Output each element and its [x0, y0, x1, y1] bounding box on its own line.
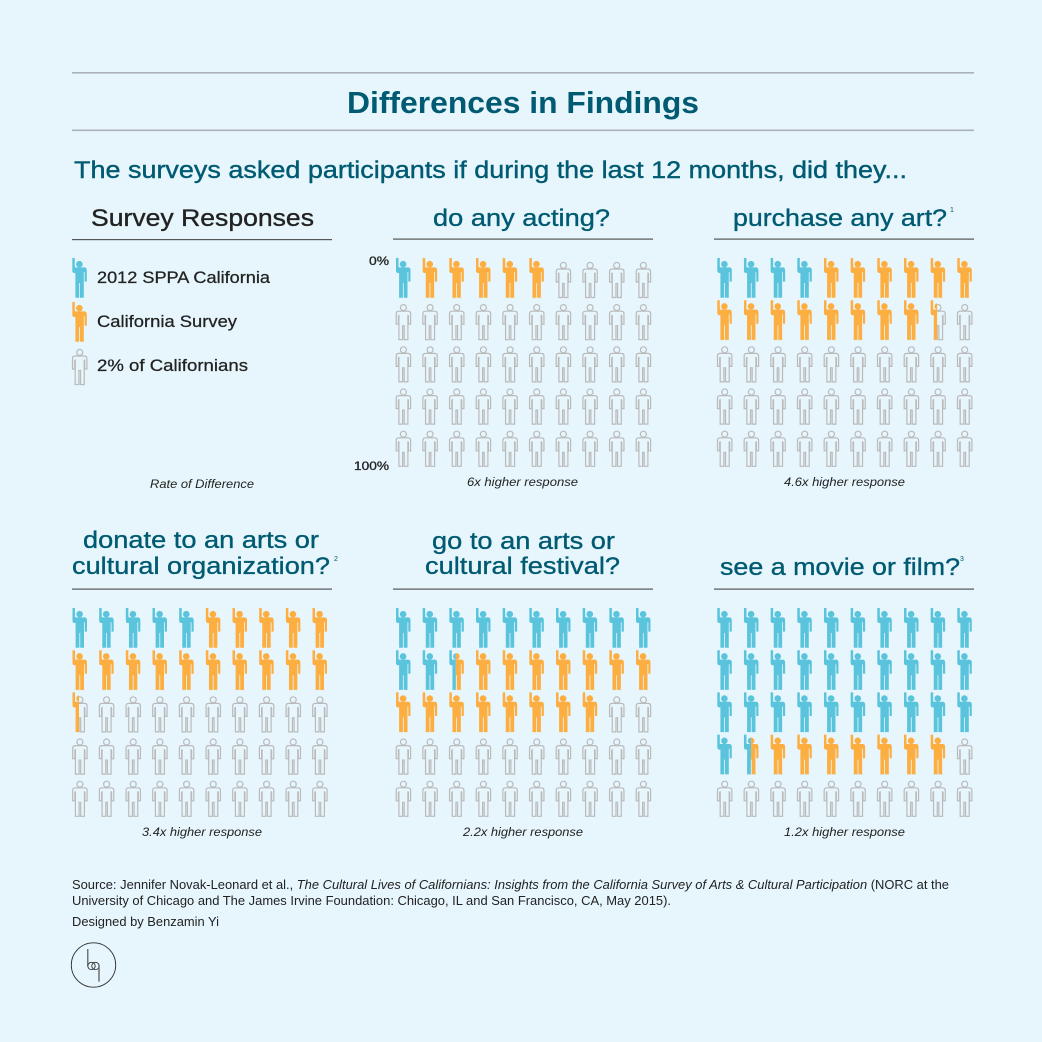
heading: purchase any art? [733, 205, 947, 232]
rate caption: 6x higher response [467, 475, 578, 489]
rate caption: 3.4x higher response [142, 825, 262, 839]
legend item: California Survey [72, 302, 238, 342]
panel: go to an arts or cultural festival? [393, 528, 653, 839]
heading: go to an arts or [432, 528, 615, 555]
title: Differences in Findings [347, 86, 699, 120]
pictogram chart [717, 258, 972, 466]
heading [393, 528, 653, 590]
heading: see a movie or film? [720, 554, 960, 581]
legend item: 2012 SPPA California [72, 258, 271, 298]
heading [714, 205, 974, 240]
scale labels: 100% [354, 461, 389, 473]
source note: Source: Jennifer Novak-Leonard et al., The Cultural Lives of Californians: Insights from the California Survey of Arts & Cultural Participation (NORC at the [72, 878, 949, 892]
heading: donate to an arts or [83, 527, 319, 554]
scale labels [354, 256, 389, 473]
pictogram chart [396, 258, 651, 466]
designer credit: Designed by Benzamin Yi [72, 915, 219, 929]
legend item: California Survey: California Survey [97, 313, 238, 331]
legend item: 2012 SPPA California: 2012 SPPA California [97, 269, 271, 287]
source note: University of Chicago and The James Irvine Foundation: Chicago, IL and San Francisco, CA, May 2015). [72, 894, 671, 908]
heading: 1 [950, 207, 954, 214]
legend heading: Survey Responses [91, 205, 314, 232]
source note [72, 878, 949, 908]
rate of difference label: Rate of Difference [150, 477, 254, 491]
icon: designer logo [71, 943, 116, 987]
legend item: 2% of Californians: 2% of Californians [97, 357, 248, 375]
panel: donate to an arts or cultural organization? [72, 527, 338, 839]
heading: do any acting? [433, 205, 610, 232]
panel: purchase any art? [714, 205, 974, 489]
pictogram chart [396, 608, 651, 816]
pictogram chart [72, 608, 327, 816]
heading [714, 554, 974, 590]
panel: do any acting? [354, 205, 653, 489]
heading: cultural organization? [72, 553, 330, 580]
heading [72, 527, 338, 590]
heading: cultural festival? [425, 553, 620, 580]
heading: 3 [960, 556, 964, 563]
panel: see a movie or film? [714, 554, 974, 839]
scale labels: 0% [369, 256, 389, 268]
rate caption: 2.2x higher response [462, 825, 583, 839]
subtitle: The surveys asked participants if during the last 12 months, did they... [74, 157, 907, 184]
legend item: 2% of Californians [72, 349, 248, 384]
pictogram chart [717, 608, 972, 816]
rate caption: 1.2x higher response [784, 825, 905, 839]
panel: legend [72, 205, 332, 491]
rate caption: 4.6x higher response [784, 475, 905, 489]
heading: 2 [334, 556, 338, 563]
